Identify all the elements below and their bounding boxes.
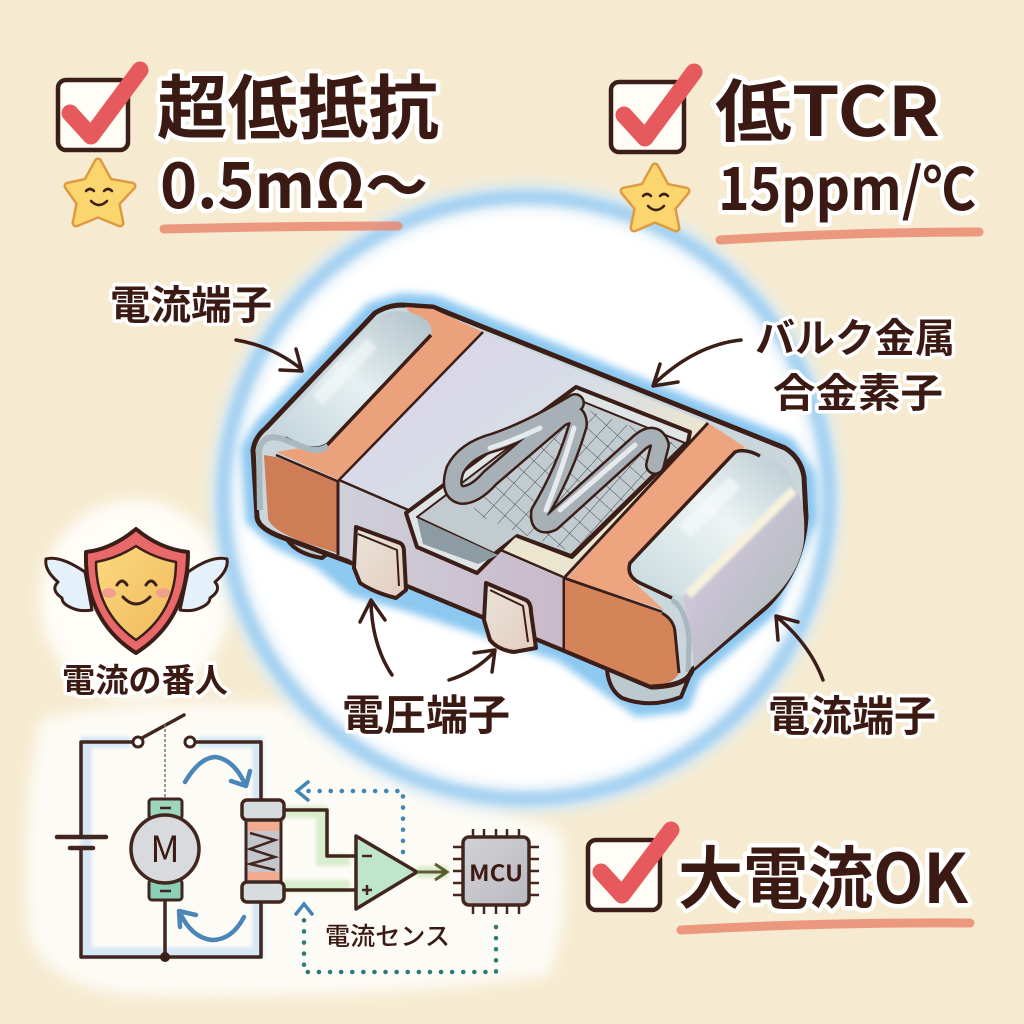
red check mark [70,70,140,136]
voltage terminal left [354,527,406,598]
left cap top [272,312,432,448]
right copper band top [567,423,745,610]
green dotted feedback [304,918,496,972]
check item: low TCR [611,57,979,240]
blue halo [253,305,806,705]
label: voltage terminal: 電圧端子 [342,692,510,739]
icon: star right [624,167,686,228]
voltage terminal right [484,583,536,652]
switch [133,715,195,799]
circuit diagram [57,715,539,972]
main wires [81,742,261,957]
meander element [453,403,660,524]
right copper front [565,580,679,685]
checkbox [58,80,128,150]
heading: 超低抵抗 [157,70,439,148]
MCU chip: MCU [469,856,523,888]
arrow: to right voltage terminal [449,650,495,680]
label: current sense: 電流センス [325,923,450,951]
shunt resistor [242,800,284,902]
shield [86,529,188,653]
label: guardian of current: 電流の番人 [62,662,228,699]
arrow: to right current terminal [776,616,823,680]
green feedback arrowhead [296,904,312,914]
checkbox [588,840,660,910]
right copper edges [564,423,708,612]
label: bulk metal alloy element: 合金素子 [773,372,943,416]
right cap highlight band [688,490,794,595]
right cap top [628,452,796,597]
heading: 大電流OK [678,824,968,923]
centre face edges [339,332,563,577]
shield backdrop blob [40,500,230,700]
circuit backdrop blob [26,703,566,996]
blue dotted feedback [300,791,403,852]
front-face left edge [338,480,564,650]
check item: high current OK [588,824,970,930]
battery [57,837,106,848]
right outline top [651,670,692,687]
right cap reflection [685,482,735,532]
op amp [356,836,417,909]
value: 0.5mΩ〜 [160,136,428,226]
label: current terminal upper left: 電流端子 [110,284,272,328]
label: bulk metal alloy element [755,317,955,416]
heading: 低TCR [715,57,940,156]
window dark side [417,518,498,564]
body outline [253,305,806,687]
underline [681,923,970,930]
arrow: to bulk metal element [653,340,741,386]
feet [285,535,692,703]
left wing [46,558,92,611]
label: current terminal lower right: 電流端子 [768,693,936,740]
red check mark [624,72,694,138]
glow circle background [223,196,829,800]
centre front face [339,482,563,648]
shield inner [96,546,176,640]
left copper edge lines [276,455,337,481]
shield mascot [46,529,227,653]
window [406,387,690,573]
motor [131,799,199,962]
label: bulk metal alloy element: バルク金属 [755,317,955,361]
right cap inner edge [629,451,760,598]
sense wires [284,810,356,890]
right wing [180,558,227,611]
left cap highlight [318,343,372,400]
left copper front [264,455,337,553]
window floor [417,398,685,555]
right side panel [682,487,804,668]
right copper outline [662,613,679,673]
checkbox [611,82,684,152]
output arrow [417,864,447,880]
left cap rim [259,437,328,510]
value: 15ppm/℃ [718,143,976,227]
red check mark [601,830,671,895]
motor: M [150,821,180,873]
centre top face [339,332,708,577]
current arrows [179,757,250,940]
right cap rim [672,600,689,672]
MCU chip [453,829,539,914]
left cap inner edge [285,335,431,448]
underline [720,232,979,240]
sense highlights [284,812,448,886]
face [102,581,170,604]
check item: ultra-low resistance [58,70,439,229]
mesh [470,405,680,552]
resistor illustration [253,305,806,705]
blue feedback arrowhead [297,782,308,800]
wire highlights [86,742,258,953]
underline [164,226,398,229]
arrow: to left voltage terminal [360,600,392,675]
left copper band [276,307,483,480]
icon: star left [68,162,132,223]
arrow: to upper left terminal [236,340,302,371]
